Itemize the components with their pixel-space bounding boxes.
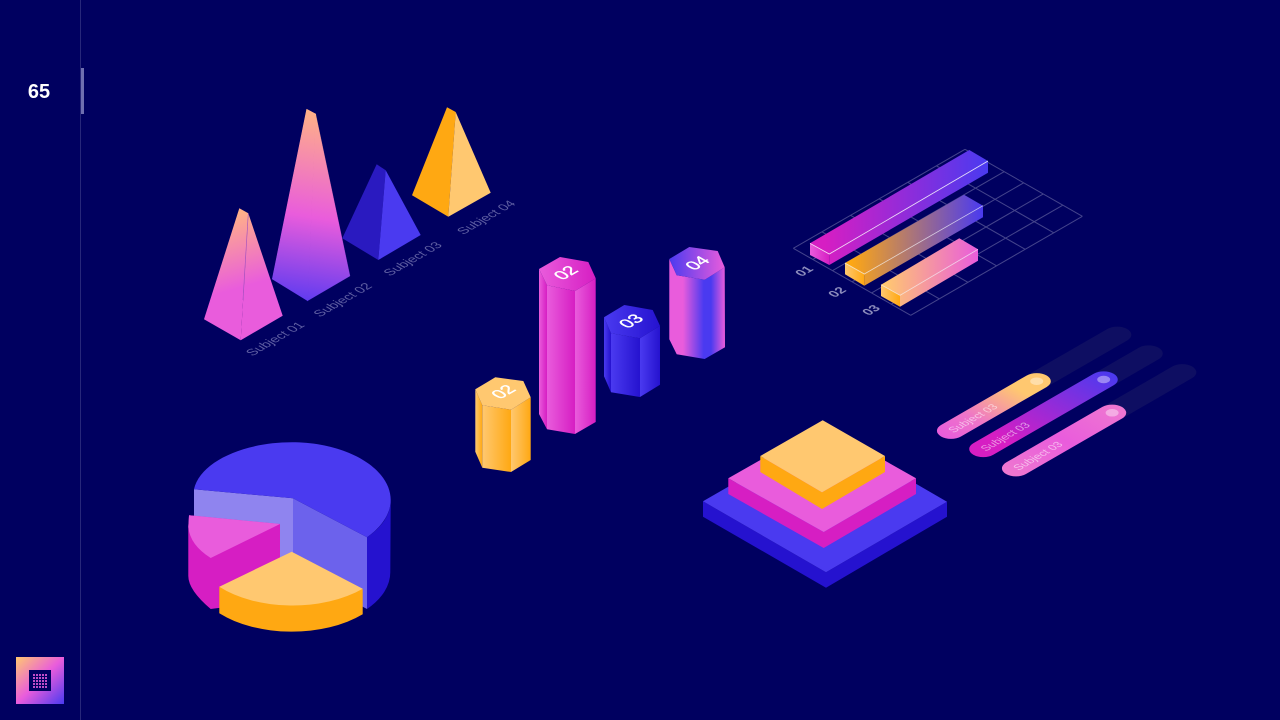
column: purple 04: 04: [680, 253, 715, 273]
progress pills: [931, 323, 1202, 480]
column: purple 04: [669, 247, 725, 359]
axis label 02: 02: [824, 285, 850, 299]
label: subject 03: Subject 03: [380, 240, 446, 278]
chart grid: [793, 149, 1082, 315]
pyramid: subject 03: [342, 164, 421, 260]
isometric bar chart: [791, 149, 1082, 317]
pill 1: [931, 323, 1137, 442]
label: subject 02: Subject 02: [310, 281, 376, 319]
layer: blue base: [703, 431, 947, 588]
pie slice: magenta: [188, 515, 280, 609]
layer: orange top: [760, 420, 885, 509]
pyramid: subject 02: [272, 109, 350, 301]
pill 2: Subject 03: [978, 421, 1033, 453]
label: subject 01: Subject 01: [242, 320, 308, 358]
pie slice: blue: [194, 442, 391, 609]
pill 3: [996, 361, 1202, 480]
label: subject 04: Subject 04: [453, 198, 519, 236]
pyramid: subject 04: [412, 107, 491, 217]
hexagonal column chart: [475, 247, 725, 472]
axis label 01: 01: [791, 264, 817, 278]
column: magenta 02: [539, 257, 596, 434]
bar 02: [845, 195, 983, 286]
column: blue 03: [604, 305, 660, 397]
bar 03: [881, 238, 978, 307]
pill 2: [963, 342, 1169, 460]
pie slice: orange: [219, 552, 363, 632]
pyramid: subject 01: [204, 208, 283, 340]
sidebar: [16, 0, 84, 720]
page number: 65: [28, 81, 50, 103]
column: orange 02: [475, 377, 531, 472]
pie chart: [188, 442, 391, 632]
pyramid chart: [204, 107, 519, 358]
column: blue 03: 03: [614, 311, 648, 331]
bar 01: [810, 150, 988, 265]
column: magenta 02: 02: [549, 263, 583, 283]
layer: pink middle: [728, 425, 916, 548]
pill 1: Subject 03: [946, 403, 1001, 435]
stacked layers: [703, 420, 947, 588]
column: orange 02: 02: [486, 382, 520, 402]
page position marker: [81, 68, 84, 114]
axis label 03: 03: [858, 303, 884, 317]
pill 3: Subject 03: [1011, 440, 1066, 472]
logo: [16, 657, 64, 704]
